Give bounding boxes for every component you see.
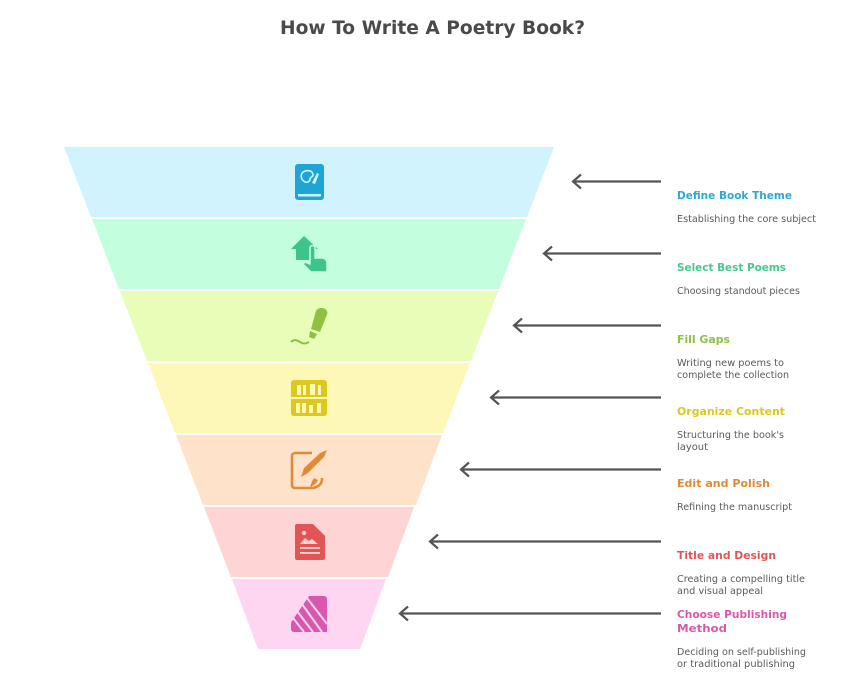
funnel band 1	[64, 147, 554, 217]
label: Choose Publishing Method: or traditional publishing	[677, 659, 795, 670]
arrow 6	[430, 534, 661, 548]
label: Define Book Theme	[677, 189, 816, 225]
label: Title and Design: Title and Design	[677, 549, 776, 562]
label: Fill Gaps: Writing new poems to	[677, 358, 784, 369]
label: Organize Content: layout	[677, 442, 708, 453]
label: Fill Gaps	[677, 333, 789, 381]
funnel band 7	[232, 579, 386, 649]
title: How To Write A Poetry Book?	[280, 17, 585, 39]
icon: book with palette	[295, 164, 324, 200]
label: Select Best Poems	[677, 261, 800, 297]
funnel band 4	[148, 363, 470, 433]
label: Choose Publishing Method	[677, 608, 806, 670]
label: Edit and Polish	[677, 477, 792, 513]
label: Organize Content	[677, 405, 785, 453]
icon: document with image	[295, 524, 325, 560]
icon: striped publishing mark	[291, 596, 327, 632]
arrow 5	[461, 462, 661, 476]
label: Title and Design: Creating a compelling title	[677, 574, 805, 585]
label: Choose Publishing Method: Deciding on self-publishing	[677, 647, 806, 658]
label: Fill Gaps: complete the collection	[677, 370, 789, 381]
funnel band 5	[176, 435, 442, 505]
arrow 3	[514, 318, 661, 332]
arrow 4	[491, 390, 661, 404]
funnel band 3	[120, 291, 498, 361]
label: Choose Publishing Method: Method	[677, 622, 727, 635]
arrow 7	[400, 606, 661, 620]
funnel band 6	[204, 507, 414, 577]
label: Define Book Theme: Establishing the core subject	[677, 214, 816, 225]
icon: hand pointing at house	[291, 236, 327, 272]
label: Select Best Poems: Choosing standout pieces	[677, 286, 800, 297]
label: Title and Design: and visual appeal	[677, 586, 763, 597]
label: Edit and Polish: Edit and Polish	[677, 477, 770, 490]
label: Organize Content: Organize Content	[677, 405, 785, 418]
icon: pen on page	[292, 450, 327, 488]
arrow 2	[544, 246, 661, 260]
label: Select Best Poems: Select Best Poems	[677, 261, 786, 274]
label: Define Book Theme: Define Book Theme	[677, 189, 792, 202]
label: Choose Publishing Method: Choose Publishing	[677, 608, 787, 621]
label: Fill Gaps: Fill Gaps	[677, 333, 730, 346]
label: Title and Design	[677, 549, 805, 597]
funnel band 2	[92, 219, 526, 289]
funnel chart	[64, 147, 554, 649]
arrow 1	[573, 174, 661, 188]
icon: pen with squiggle	[291, 308, 327, 344]
icon: bookshelf	[291, 380, 327, 416]
label: Organize Content: Structuring the book's	[677, 430, 784, 441]
label: Edit and Polish: Refining the manuscript	[677, 502, 792, 513]
